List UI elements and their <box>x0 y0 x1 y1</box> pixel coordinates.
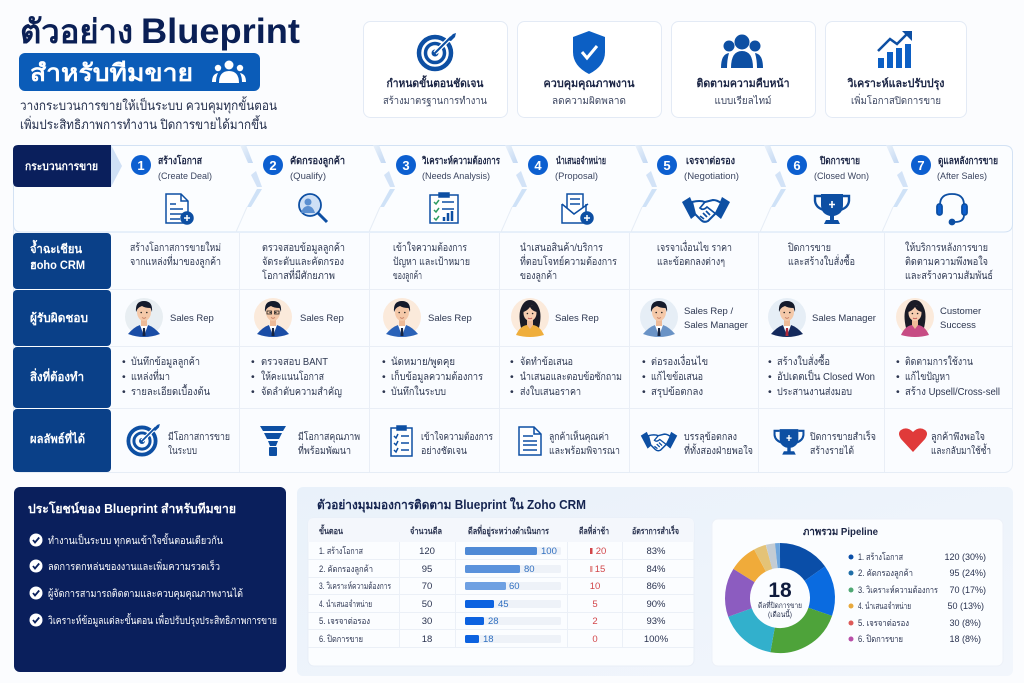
icon: shield <box>573 31 605 74</box>
legend: 1. สร้างโอกาส <box>858 552 903 562</box>
table row 5 <box>319 616 666 627</box>
tasks row: • <box>896 386 900 398</box>
panel: process matrix <box>14 146 1012 472</box>
step 6: (Closed Won) <box>814 171 869 181</box>
panel: benefits <box>14 487 286 672</box>
badge: สำหรับทีมขาย <box>19 53 260 91</box>
result 6: trophy <box>775 429 876 457</box>
row label: results: ผลลัพธ์ที่ได้ <box>30 430 85 446</box>
tasks row: แก้ไขข้อเสนอ <box>651 370 703 383</box>
descriptions row: ให้บริการหลังการขาย <box>905 241 988 254</box>
tasks row: • <box>382 386 386 398</box>
owner row: Customer <box>940 306 981 317</box>
step 4 <box>528 155 606 224</box>
table row 2: 80 <box>524 564 535 575</box>
tasks row: ประสานงานส่งมอบ <box>777 386 852 398</box>
owner row: Sales Manager <box>684 320 748 331</box>
avatar: sales rep 1 <box>125 298 163 337</box>
legend: 70 (17%) <box>949 585 986 595</box>
panel: feature card 2: ลดความผิดพลาด <box>552 96 626 107</box>
legend: 4. นำเสนอจำหน่าย <box>858 601 911 611</box>
result 6: trophy: สร้างรายได้ <box>810 445 854 457</box>
subtitle: วางกระบวนการขายให้เป็นระบบ ควบคุมทุกขั้นตอน <box>20 96 277 114</box>
step 2 <box>263 155 345 222</box>
table row 1 <box>319 546 666 557</box>
panel: feature card 4: วิเคราะห์และปรับปรุง <box>847 77 944 91</box>
tasks row: สร้าง Upsell/Cross-sell <box>905 386 1000 398</box>
step 2: (Qualify) <box>290 171 326 181</box>
table row 3: 10 <box>590 581 600 592</box>
step 6: ปิดการขาย <box>819 155 860 167</box>
panel: feature card 3: แบบเรียลไทม์ <box>714 95 772 107</box>
table row 5: 5. เจรจาต่อรอง <box>319 616 370 626</box>
tasks row: บันทึกข้อมูลลูกค้า <box>131 356 200 368</box>
row label: owner <box>13 290 111 346</box>
panel: feature card 3: ติดตามความคืบหน้า <box>696 77 790 90</box>
table row 1: 1. สร้างโอกาส <box>319 546 363 556</box>
donut centre label <box>758 579 802 619</box>
legend: 2. คัดกรองลูกค้า <box>858 568 913 579</box>
title: ตัวอย่าง <box>20 13 133 50</box>
step 2: คัดกรองลูกค้า <box>290 155 345 168</box>
panel: dashboard <box>297 487 1013 676</box>
donut centre label: (เดือนนี้) <box>768 609 792 619</box>
tasks row: • <box>510 356 514 368</box>
row label: to do: สิ่งที่ต้องทำ <box>30 368 84 384</box>
legend: 50 (13%) <box>947 601 984 611</box>
icon: headset <box>937 194 967 224</box>
heading: ประโยชน์ของ Blueprint สำหรับทีมขาย <box>28 501 236 516</box>
tasks row: นัดหมาย/พูดคุย <box>391 356 455 368</box>
icon: proposal mail <box>562 194 593 224</box>
row label: zoho crm: จ้ำฉะเชียน <box>30 239 83 256</box>
step 5: (Negotiation) <box>684 171 739 181</box>
table row 6: 18 <box>422 634 432 645</box>
step 3 <box>396 155 501 223</box>
tasks row: แก้ไขปัญหา <box>905 370 950 383</box>
descriptions row: เข้าใจความต้องการ <box>393 241 467 254</box>
table row 5: 30 <box>422 616 432 627</box>
tasks row: เก็บข้อมูลความต้องการ <box>391 369 483 383</box>
tasks row: • <box>382 356 386 368</box>
step 1: สร้างโอกาส <box>158 154 203 167</box>
row label: sales process: กระบวนการขาย <box>25 161 98 173</box>
owner row: Sales Rep / <box>684 306 733 317</box>
tasks row: ตรวจสอบ BANT <box>261 356 329 368</box>
tasks row: แหล่งที่มา <box>131 369 170 383</box>
icon: trophy <box>815 194 849 224</box>
step 7 <box>911 155 998 224</box>
table row 2: 84% <box>646 564 666 575</box>
icon: handshake <box>682 197 730 222</box>
descriptions row: และสร้างความสัมพันธ์ <box>905 269 993 282</box>
tasks row: จัดลำดับความสำคัญ <box>261 386 342 398</box>
icon: team <box>212 60 246 83</box>
descriptions row: ติดตามความพึงพอใจ <box>905 255 988 268</box>
table row 2: 15 <box>595 564 605 575</box>
result 4: document: และพร้อมพิจารณา <box>549 445 620 457</box>
table row 2: 95 <box>422 564 432 575</box>
donut centre label: ดีลที่ปิดการขาย <box>758 600 802 610</box>
tasks row: ต่อรองเงื่อนไข <box>651 354 708 368</box>
table row 1: 100 <box>541 546 557 557</box>
owner row: Sales Rep <box>170 313 214 324</box>
result 7: heart: และกลับมาใช้ซ้ำ <box>931 443 991 457</box>
table row 3 <box>319 580 666 592</box>
tasks row: • <box>251 371 255 383</box>
table: ขั้นตอน <box>319 524 344 536</box>
descriptions row: และสร้างใบสั่งซื้อ <box>788 254 855 268</box>
tasks row: • <box>251 386 255 398</box>
result 5: handshake <box>641 431 753 457</box>
legend: 6. ปิดการขาย <box>858 634 903 644</box>
table row 6: 0 <box>592 634 598 645</box>
tasks row: บันทึกในระบบ <box>391 385 446 398</box>
tasks row: จัดทำข้อเสนอ <box>520 356 573 368</box>
legend: 30 (8%) <box>949 618 981 628</box>
step 4: นำเสนอจำหน่าย <box>556 155 606 167</box>
table <box>308 518 694 666</box>
step 7: (After Sales) <box>937 171 987 181</box>
tasks row: ให้คะแนนโอกาส <box>261 370 324 383</box>
legend: 120 (30%) <box>944 552 986 562</box>
subtitle <box>20 96 277 132</box>
result 2: funnel: มีโอกาสคุณภาพ <box>298 430 360 443</box>
owner row: Sales Rep <box>300 313 344 324</box>
table row 3: 70 <box>422 581 432 592</box>
descriptions row: และข้อตกลงต่างๆ <box>657 256 725 268</box>
title: Blueprint <box>141 12 300 51</box>
owner row: Sales Rep <box>428 313 472 324</box>
result 5: handshake: ที่ทั้งสองฝ่ายพอใจ <box>684 443 753 457</box>
avatar: sales rep 4 <box>511 298 549 337</box>
descriptions row: ปิดการขาย <box>788 242 831 254</box>
row label: owner: ผู้รับผิดชอบ <box>30 311 88 326</box>
tasks row: • <box>122 386 126 398</box>
benefit 4 <box>30 613 277 627</box>
tasks row: • <box>896 356 900 368</box>
table row 2 <box>319 564 666 575</box>
table row 4: 90% <box>646 599 666 610</box>
results row <box>128 424 991 457</box>
result 1: target <box>128 424 230 457</box>
icon: people <box>721 34 763 68</box>
pipeline card <box>712 519 1003 666</box>
tasks row: • <box>122 356 126 368</box>
step 5 <box>657 155 739 222</box>
tasks row: • <box>122 371 126 383</box>
donut centre label: 18 <box>768 579 792 602</box>
table row 5: 28 <box>488 616 499 627</box>
descriptions row: เจรจาเงื่อนไข ราคา <box>657 240 732 254</box>
table row 4: 4. นำเสนอจำหน่าย <box>319 599 372 609</box>
tasks row: สร้างใบสั่งซื้อ <box>777 354 830 368</box>
legend: 18 (8%) <box>949 634 981 644</box>
descriptions row <box>130 240 993 282</box>
avatar: sales manager <box>768 298 806 337</box>
tasks row <box>122 354 1000 398</box>
step 3: (Needs Analysis) <box>422 171 490 181</box>
legend: 3. วิเคราะห์ความต้องการ <box>858 584 938 595</box>
descriptions row: ของลูกค้า <box>393 270 422 282</box>
table row 4: 45 <box>498 599 509 610</box>
icon: target <box>419 33 456 69</box>
result 3: checklist: เข้าใจความต้องการ <box>421 431 494 443</box>
descriptions row: ปัญหา และเป้าหมาย <box>393 256 470 268</box>
table row 4 <box>319 599 666 610</box>
owner row: Success <box>940 320 976 331</box>
benefit 4: วิเคราะห์ข้อมูลแต่ละขั้นตอน เพื่อปรับปรุงประสิทธิภาพการขาย <box>48 613 277 627</box>
step 6 <box>787 155 869 224</box>
chevron arrows <box>236 145 908 232</box>
title <box>20 12 300 51</box>
legend: 95 (24%) <box>949 568 986 578</box>
row label: sales process <box>13 145 122 187</box>
tasks row: นำเสนอและตอบข้อซักถาม <box>520 371 622 383</box>
panel: feature card 1 <box>364 22 508 118</box>
step 6: 6 <box>793 158 801 173</box>
dashboard heading: ตัวอย่างมุมมองการติดตาม Blueprint ใน Zoho CRM <box>317 497 586 513</box>
result 2: funnel: ที่พร้อมพัฒนา <box>298 443 351 457</box>
tasks row: • <box>642 371 646 383</box>
table: ดีลที่อยู่ระหว่างดำเนินการ <box>468 524 549 537</box>
avatar: customer success <box>896 298 934 337</box>
tasks row: • <box>510 386 514 398</box>
result 1: target: ในระบบ <box>168 445 197 457</box>
panel: feature card 1: สร้างมาตรฐานการทำงาน <box>383 95 487 107</box>
step 4: (Proposal) <box>555 171 598 181</box>
step 3: 3 <box>402 158 410 173</box>
tasks row: ติดตามการใช้งาน <box>905 355 973 368</box>
icon: checklist <box>430 193 458 223</box>
tasks row: • <box>768 356 772 368</box>
result 5: handshake: บรรลุข้อตกลง <box>684 431 737 443</box>
owner row: Sales Rep <box>555 313 599 324</box>
icon: magnifier <box>299 194 327 222</box>
panel: feature card 4 <box>826 22 966 118</box>
result 2: funnel <box>260 426 360 457</box>
benefit 1 <box>30 533 223 547</box>
table row 6: 18 <box>483 634 494 645</box>
tasks row: • <box>251 356 255 368</box>
descriptions row: นำเสนอสินค้า/บริการ <box>520 242 603 254</box>
icon: new document <box>166 194 193 224</box>
pipeline card: ภาพรวม Pipeline <box>803 526 878 538</box>
descriptions row: จัดระดับและคัดกรอง <box>262 256 344 268</box>
table row 1: 120 <box>419 546 435 557</box>
descriptions row: จากแหล่งที่มาของลูกค้า <box>130 254 221 268</box>
step 1: (Create Deal) <box>158 171 212 181</box>
tasks row: ส่งใบเสนอราคา <box>520 385 581 398</box>
step 7: ดูแลหลังการขาย <box>938 155 998 168</box>
result 3: checklist <box>391 426 494 457</box>
step 1: 1 <box>137 158 145 173</box>
result 7: heart: ลูกค้าพึงพอใจ <box>931 431 985 443</box>
table row 1: 83% <box>646 546 666 557</box>
tasks row: • <box>768 371 772 383</box>
subtitle: เพิ่มประสิทธิภาพการทำงาน ปิดการขายได้มากขึ้น <box>20 115 267 132</box>
tasks row: • <box>510 371 514 383</box>
benefit 3: ผู้จัดการสามารถติดตามและควบคุมคุณภาพงานได้ <box>48 587 243 600</box>
table row 3: 86% <box>646 581 666 592</box>
result 4: document: ลูกค้าเห็นคุณค่า <box>549 429 609 443</box>
tasks row: อัปเดตเป็น Closed Won <box>777 369 875 383</box>
tasks row: สรุปข้อตกลง <box>651 386 703 398</box>
table row 5: 2 <box>592 616 598 627</box>
avatar: sales rep 3 <box>383 298 421 337</box>
table: อัตราการสำเร็จ <box>632 524 679 536</box>
benefit 2: ลดการตกหล่นของงานและเพิ่มความรวดเร็ว <box>48 559 220 573</box>
legend <box>848 552 986 644</box>
tasks row: รายละเอียดเบื้องต้น <box>131 384 210 398</box>
icon: growth chart <box>878 31 912 68</box>
table row 6 <box>319 634 669 645</box>
result 4: document <box>519 427 620 457</box>
descriptions row: ที่ตอบโจทย์ความต้องการ <box>520 254 617 268</box>
tasks row: • <box>642 356 646 368</box>
tasks row: • <box>382 371 386 383</box>
table row 1: 20 <box>596 546 606 557</box>
badge: สำหรับทีมขาย: สำหรับทีมขาย <box>30 60 193 87</box>
tasks row: • <box>768 386 772 398</box>
table row 3: 60 <box>509 581 520 592</box>
table row 6: 6. ปิดการขาย <box>319 634 363 644</box>
row label: zoho crm: ฮoho CRM <box>30 258 85 272</box>
avatar: sales rep and manager <box>640 298 678 337</box>
donut chart <box>737 556 823 641</box>
table row 2: 2. คัดกรองลูกค้า <box>319 564 373 575</box>
tasks row: • <box>896 371 900 383</box>
panel: feature card 2 <box>518 22 662 118</box>
step 4: 4 <box>534 158 542 173</box>
table row 3: 3. วิเคราะห์ความต้องการ <box>319 580 391 591</box>
panel: feature card 4: เพิ่มโอกาสปิดการขาย <box>851 93 941 107</box>
step 3: วิเคราะห์ความต้องการ <box>422 155 501 167</box>
table row 4: 5 <box>592 599 598 610</box>
result 3: checklist: อย่างชัดเจน <box>421 446 467 457</box>
result 6: trophy: ปิดการขายสำเร็จ <box>809 429 876 443</box>
descriptions row: ตรวจสอบข้อมูลลูกค้า <box>262 242 345 254</box>
legend: 5. เจรจาต่อรอง <box>858 618 909 628</box>
table row 4: 50 <box>422 599 432 610</box>
owner row: Sales Manager <box>812 313 876 324</box>
step 1 <box>131 154 212 224</box>
step 2: 2 <box>269 158 277 173</box>
panel: feature card 1: กำหนดขั้นตอนชัดเจน <box>386 75 484 90</box>
benefit 2 <box>30 559 220 573</box>
step 7: 7 <box>917 158 925 173</box>
result 7: heart <box>899 428 991 457</box>
descriptions row: ของลูกค้า <box>520 270 557 282</box>
panel: feature card 3 <box>672 22 816 118</box>
table: จำนวนดีล <box>410 526 442 536</box>
row label: zoho crm <box>13 233 111 289</box>
descriptions row: โอกาสที่มีศักยภาพ <box>262 268 335 282</box>
owner row <box>125 298 981 337</box>
benefit 1: ทำงานเป็นระบบ ทุกคนเข้าใจขั้นตอนเดียวกัน <box>48 533 223 547</box>
avatar: sales rep 2 <box>254 298 292 337</box>
row label: to do <box>13 347 111 408</box>
tasks row: • <box>642 386 646 398</box>
table row 5: 93% <box>646 616 666 627</box>
result 1: target: มีโอกาสการขาย <box>168 430 230 443</box>
step 5: 5 <box>663 158 671 173</box>
table: ดีลที่ล่าช้า <box>579 524 609 536</box>
step 5: เจรจาต่อรอง <box>686 155 735 167</box>
descriptions row: สร้างโอกาสการขายใหม่ <box>130 241 221 254</box>
row label: results <box>13 409 111 472</box>
table row 6: 100% <box>644 634 669 645</box>
panel: feature card 2: ควบคุมคุณภาพงาน <box>544 78 635 91</box>
